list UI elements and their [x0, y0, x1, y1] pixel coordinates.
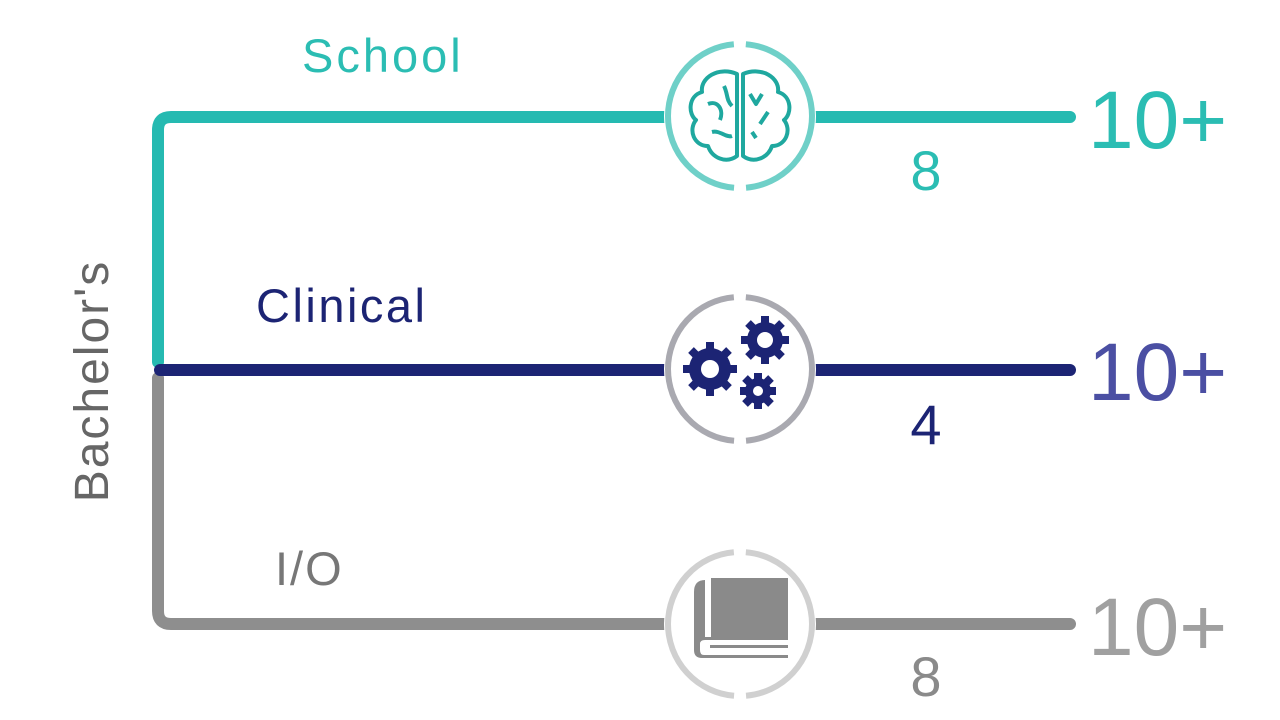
label: I/O: I/O	[275, 542, 344, 595]
label: Clinical: Clinical	[256, 279, 428, 332]
icon: book circle	[664, 548, 816, 700]
value: school 10+: 10+	[1088, 75, 1227, 166]
branch: clinical line	[160, 364, 1070, 376]
value: clinical 4: 4	[910, 393, 942, 456]
branch: io line	[158, 378, 1070, 624]
value: school 8: 8	[910, 139, 942, 202]
icon: gears circle	[664, 293, 816, 445]
value: io 8: 8	[910, 645, 942, 708]
value: io 10+: 10+	[1088, 582, 1227, 673]
icon: brain circle	[664, 40, 816, 192]
label: Bachelor's: Bachelor's	[66, 260, 119, 502]
value: clinical 10+: 10+	[1088, 327, 1227, 418]
branch: school line	[158, 117, 1070, 362]
label: School: School	[302, 29, 464, 82]
